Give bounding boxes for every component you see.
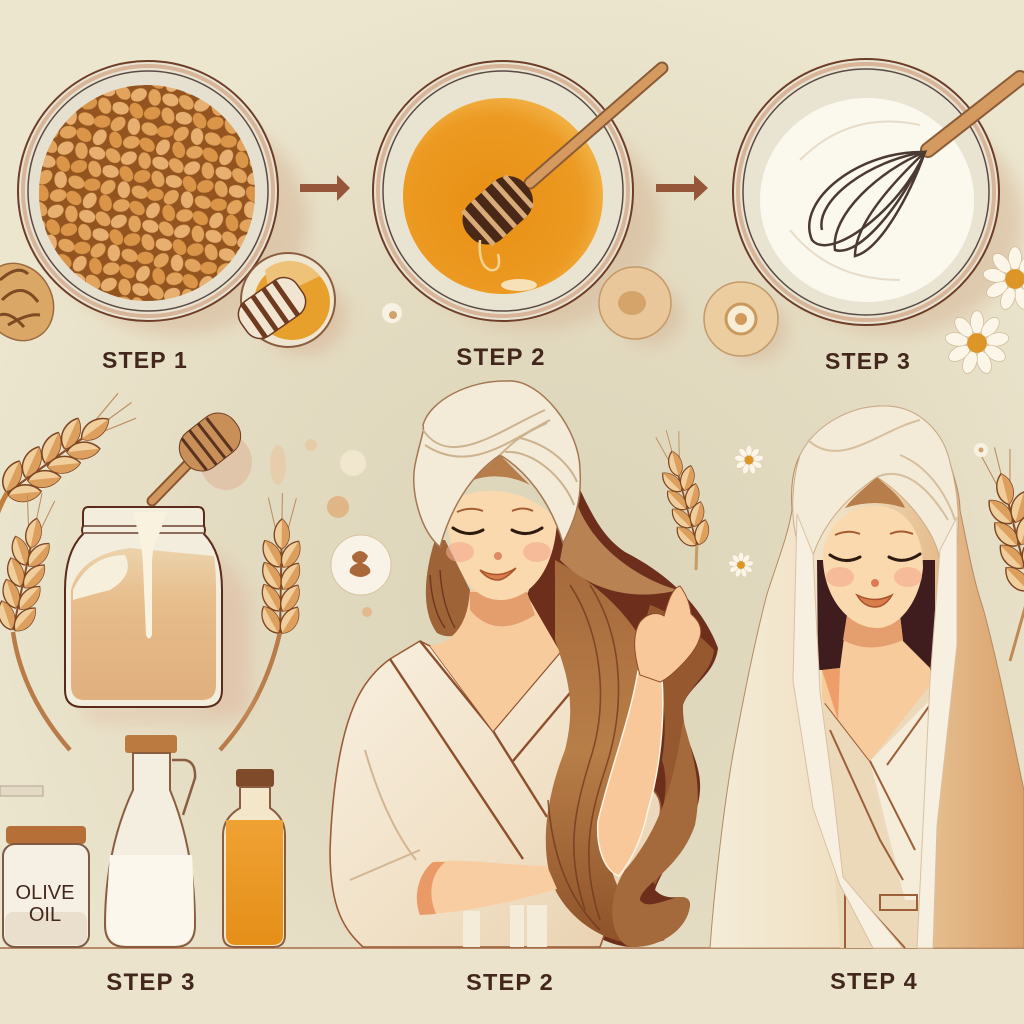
panel: woman with towel and long hair <box>330 381 718 947</box>
icon: wheat left top <box>0 382 147 520</box>
crossed arm <box>417 861 557 915</box>
icon: small flower near towel <box>974 443 988 457</box>
icon: round badge <box>331 535 391 595</box>
icon: wheat centre-right <box>647 425 717 570</box>
label: olive oil <box>16 882 74 926</box>
milk drip <box>133 512 167 638</box>
towel head <box>793 406 958 560</box>
cream <box>760 98 974 302</box>
panel: step 2 honey bowl <box>373 61 662 330</box>
icon: caramel disc <box>599 267 682 345</box>
dark hair backing <box>817 560 935 670</box>
heading: bottom step 2: STEP 2 <box>466 969 554 995</box>
whisk <box>809 78 1020 256</box>
hair left strand <box>426 540 470 636</box>
icon: tiny florets <box>270 439 372 617</box>
icon: wheat far right <box>971 441 1024 661</box>
icon: oil bottle <box>223 769 285 947</box>
icon: milk bottle <box>105 735 195 947</box>
neck and chest <box>822 615 930 761</box>
honey dipper <box>453 68 662 270</box>
towel drape <box>710 406 1024 948</box>
ground band <box>0 947 1024 1024</box>
panel: step 1 wheat bowl <box>18 61 308 334</box>
right lower lock <box>612 720 698 947</box>
panel: step 3 cream bowl <box>733 59 1023 334</box>
towel right strip <box>917 517 957 948</box>
robe collar lines <box>390 641 570 859</box>
icon: cream disc <box>704 282 787 360</box>
panel: jar <box>65 507 250 720</box>
label: olive oil: OIL <box>29 904 61 926</box>
robe <box>822 685 930 948</box>
face <box>447 491 557 600</box>
heading: step 2: STEP 2 <box>456 344 546 371</box>
heading: bottom step 4: STEP 4 <box>830 968 918 994</box>
long hair main lock <box>546 560 665 944</box>
icon: wheat left lower <box>0 488 70 750</box>
towel wrap <box>414 381 580 547</box>
icon: small tag <box>0 786 43 796</box>
icon: daisies <box>944 247 1024 375</box>
icon: small honey bowl with dipper <box>232 253 346 354</box>
honey pool <box>403 98 603 294</box>
heading: step 3: STEP 3 <box>825 348 911 374</box>
top hair strand <box>560 490 678 595</box>
hair right strands <box>640 605 714 885</box>
towel left strip <box>793 514 903 948</box>
icon: white flowers <box>728 445 764 578</box>
robe belt <box>463 905 547 947</box>
robe <box>330 641 661 947</box>
face <box>823 506 923 628</box>
icon: wheat clump left <box>0 250 67 354</box>
icon: tiny flower <box>382 303 402 323</box>
raised arm <box>598 671 663 876</box>
arrow: step 2 to 3 <box>656 175 708 201</box>
panel: woman wrapped in towel <box>710 406 1024 948</box>
neck and chest <box>430 590 560 731</box>
icon: wheat centre-left <box>220 493 306 750</box>
icon: honey dipper above jar <box>152 405 252 501</box>
arrow: step 1 to 2 <box>300 175 350 201</box>
wheat grains <box>39 85 255 301</box>
hair back <box>527 475 718 947</box>
label: olive oil: OLIVE <box>16 882 74 904</box>
heading: step 1: STEP 1 <box>102 347 188 373</box>
heading: bottom step 3: STEP 3 <box>106 969 196 996</box>
icon: olive oil jar <box>3 826 89 947</box>
hand <box>635 586 701 682</box>
